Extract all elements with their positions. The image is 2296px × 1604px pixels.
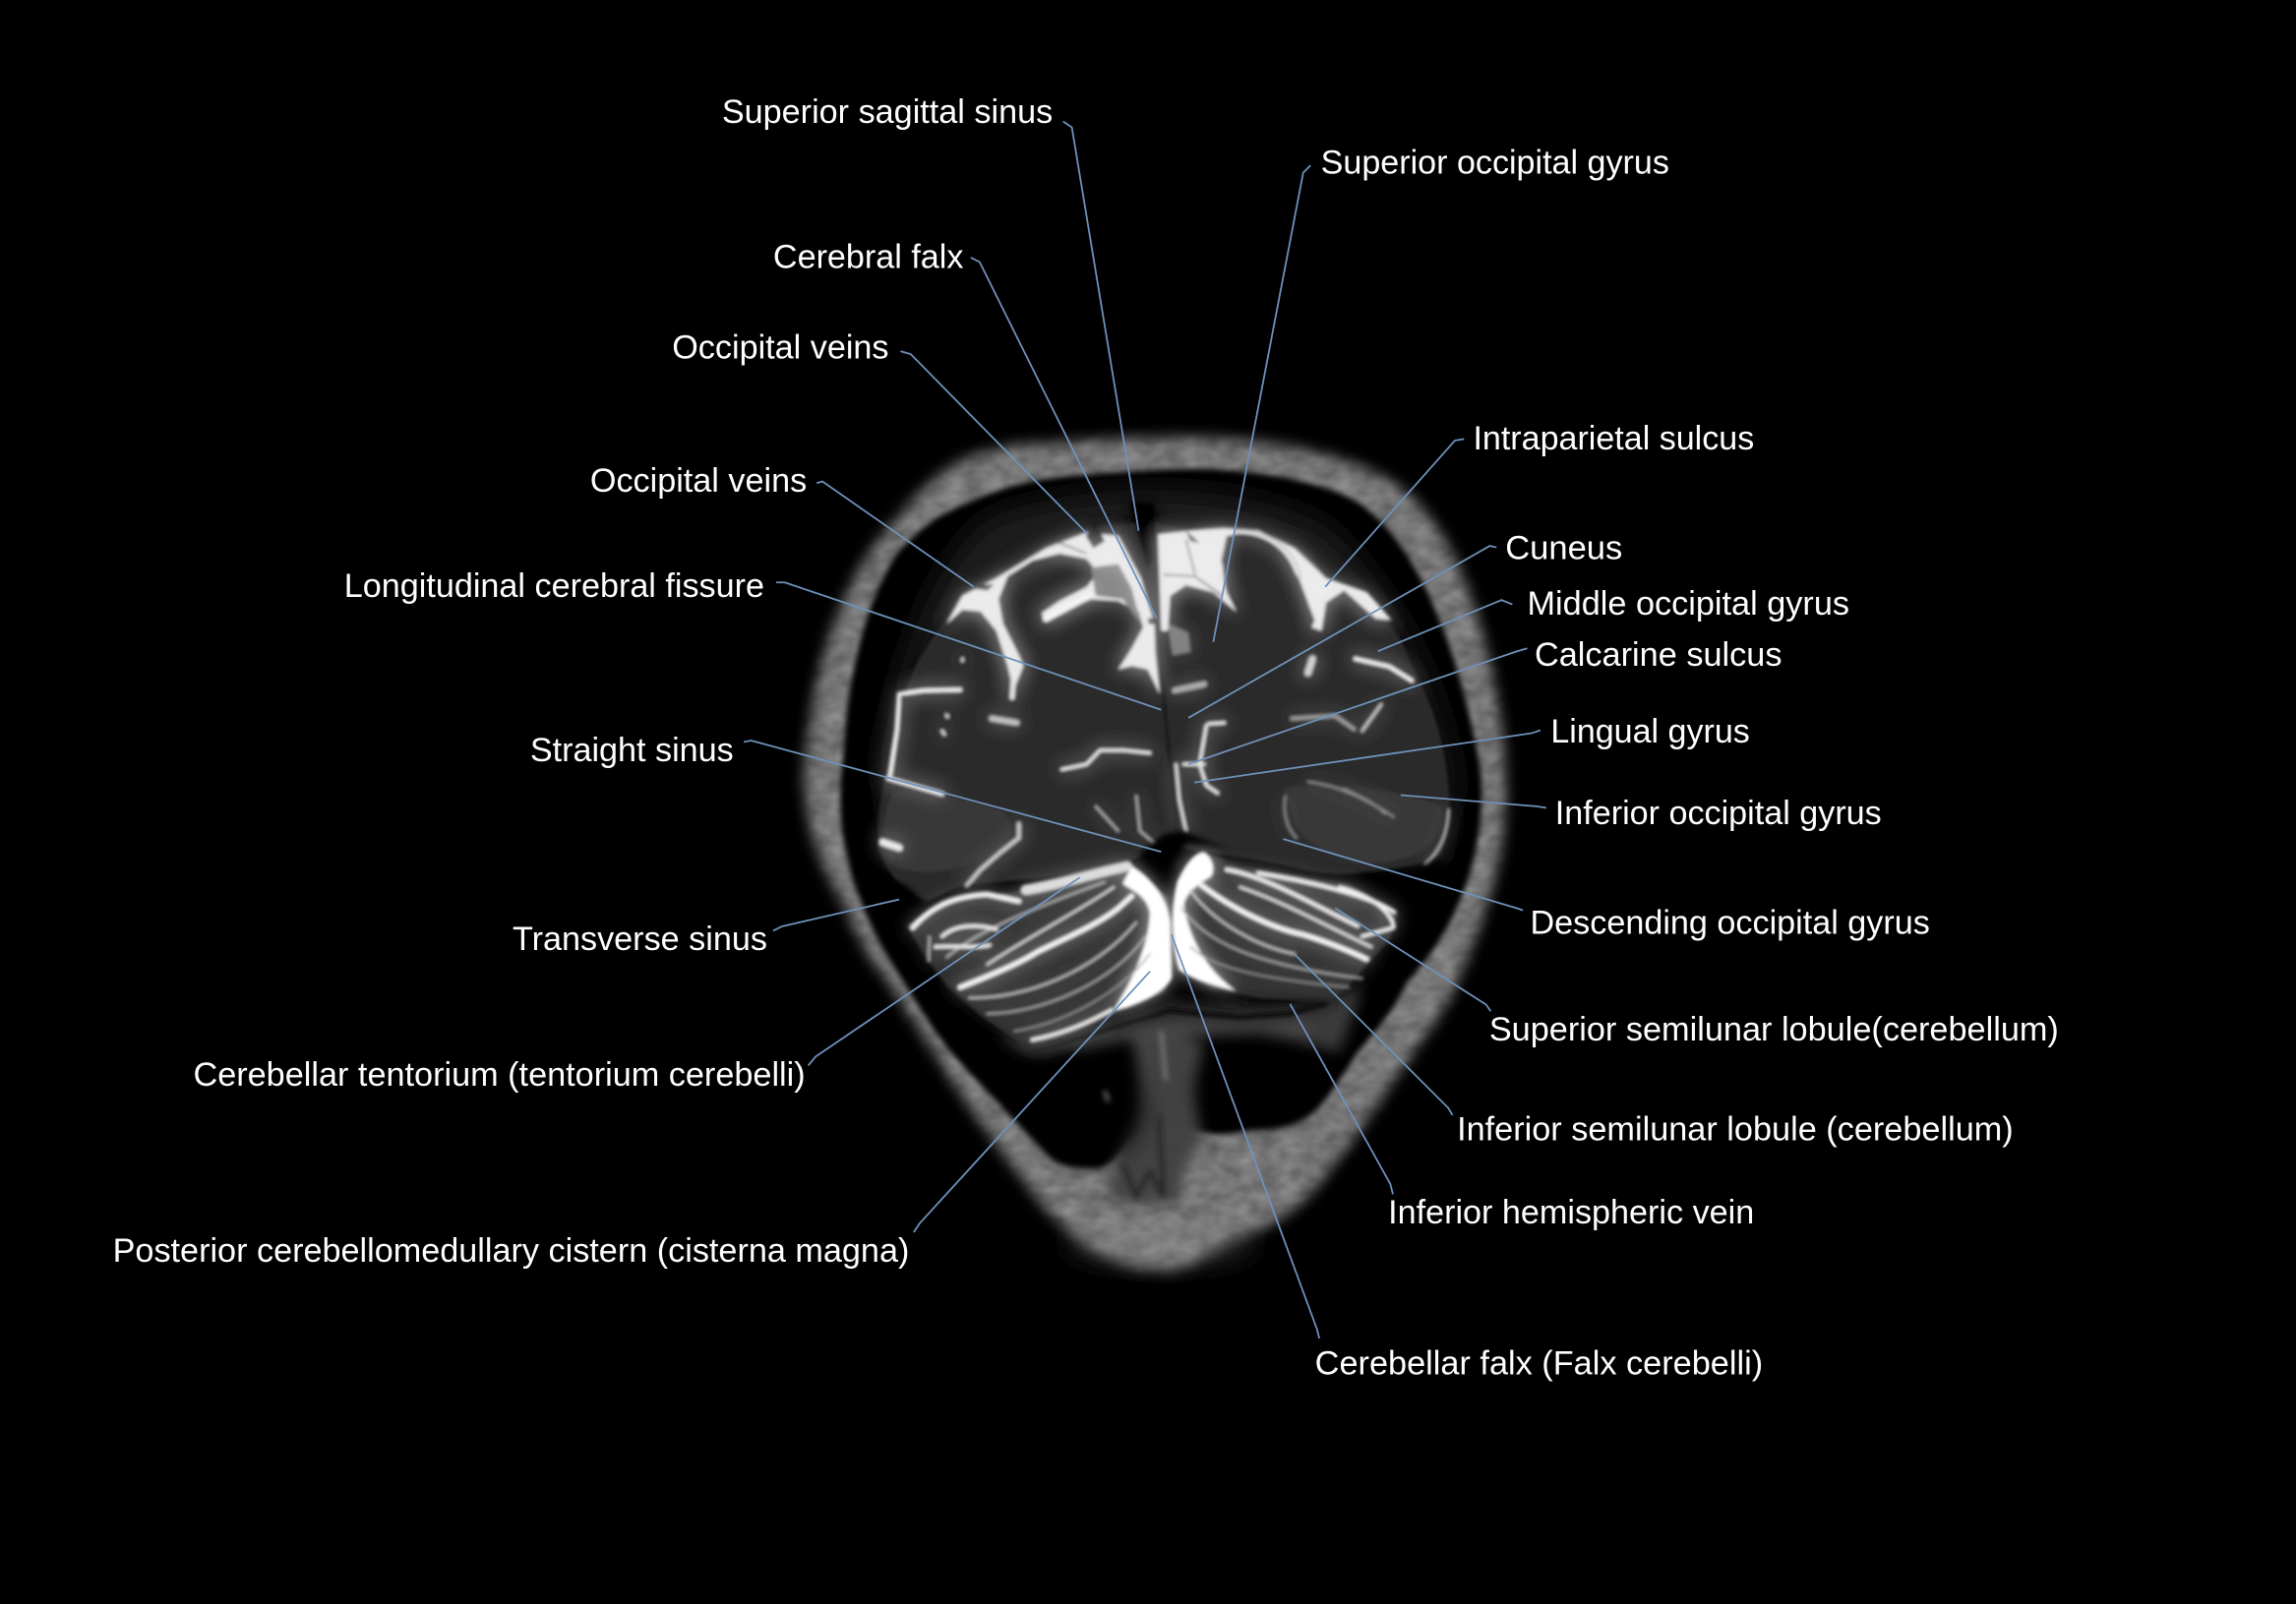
label: Longitudinal cerebral fissure: Longitudinal cerebral fissure <box>344 567 764 605</box>
label: Inferior occipital gyrus: Inferior occipital gyrus <box>1555 795 1882 832</box>
leader: Inferior hemispheric vein <box>1290 1004 1393 1194</box>
annotation layer: leader lines and labels <box>113 93 2059 1382</box>
ragged dark inferior edge <box>1033 1003 1326 1052</box>
black flow voids and falx <box>969 503 1199 624</box>
bright CSF: upper right <box>1158 528 1392 630</box>
black gaps around cerebellum <box>885 831 1443 975</box>
leader: Inferior occipital gyrus <box>1401 796 1546 807</box>
leader: Straight sinus <box>744 741 1161 852</box>
leader: Occipital veins (upper) <box>900 351 1088 534</box>
skull: dark ring inside scalp <box>840 469 1481 1168</box>
label: Superior occipital gyrus: Superior occipital gyrus <box>1321 144 1669 181</box>
right cerebellar hemisphere <box>1173 852 1398 999</box>
bright CSF: upper left <box>946 532 1160 694</box>
leader: Cuneus <box>1188 546 1496 718</box>
cerebellar folia <box>913 866 1394 1040</box>
leader: Transverse sinus <box>773 900 899 930</box>
midline neck structure <box>1105 1032 1166 1196</box>
label: Transverse sinus: Transverse sinus <box>513 921 767 958</box>
label: Posterior cerebellomedullary cistern: Posterior cerebellomedullary cistern (cisterna magna) <box>113 1232 909 1270</box>
left cerebellar hemisphere <box>906 864 1173 1045</box>
brain base: dark gray matter <box>878 522 1449 903</box>
midline fissure <box>1154 525 1177 831</box>
neck muscle and fat below the cerebellum <box>997 989 1362 1204</box>
subtle lighter cortex patches <box>883 785 1443 872</box>
label: Descending occipital gyrus: Descending occipital gyrus <box>1531 904 1930 941</box>
leader: Posterior cerebellomedullary cistern <box>914 972 1150 1232</box>
leader: Descending occipital gyrus <box>1284 839 1523 911</box>
leader: Superior semilunar lobule <box>1335 908 1490 1011</box>
leader: Intraparietal sulcus <box>1325 439 1464 587</box>
label: Occipital veins (upper): Occipital veins <box>672 329 889 367</box>
veins crossing CSF <box>1059 540 1222 596</box>
cisterna magna: bright CSF <box>1114 852 1236 1010</box>
label: Inferior semilunar lobule: Inferior semilunar lobule (cerebellum) <box>1457 1110 2014 1148</box>
anatomical labels <box>113 93 2059 1382</box>
leader: Inferior semilunar lobule <box>1295 954 1453 1115</box>
fat-suppressed dark ovals in the neck <box>1037 1056 1317 1158</box>
label: Middle occipital gyrus: Middle occipital gyrus <box>1528 585 1849 623</box>
leader: Occipital veins (lower) <box>816 482 974 587</box>
label: Cuneus: Cuneus <box>1505 529 1622 566</box>
leader: Superior occipital gyrus <box>1213 165 1310 642</box>
label: Straight sinus: Straight sinus <box>530 732 734 769</box>
label: Cerebellar falx: Cerebellar falx (Falx cerebelli) <box>1315 1344 1763 1382</box>
leader: Superior sagittal sinus <box>1063 122 1138 531</box>
leader: Lingual gyrus <box>1194 731 1541 783</box>
label: Cerebellar tentorium: Cerebellar tentorium (tentorium cerebelli) <box>193 1056 806 1094</box>
scalp and neck soft tissue ring <box>804 437 1506 1270</box>
small gyrus near midline, left <box>1110 670 1155 704</box>
leader: Cerebellar tentorium <box>809 877 1080 1065</box>
label: Lingual gyrus: Lingual gyrus <box>1550 713 1750 750</box>
dim CSF patches inside caps <box>1091 564 1190 655</box>
faint glow below the neck <box>1067 1219 1254 1263</box>
label: Inferior hemispheric vein: Inferior hemispheric vein <box>1388 1194 1754 1231</box>
label: Calcarine sulcus: Calcarine sulcus <box>1535 636 1782 674</box>
leader: Middle occipital gyrus <box>1378 600 1512 651</box>
label: Superior sagittal sinus: Superior sagittal sinus <box>722 93 1053 131</box>
dim tissue around the brain <box>878 491 1457 869</box>
label: Occipital veins (lower): Occipital veins <box>590 462 807 500</box>
cerebellum <box>906 852 1398 1052</box>
label: Superior semilunar lobule: Superior semilunar lobule(cerebellum) <box>1489 1011 2059 1048</box>
label: Intraparietal sulcus: Intraparietal sulcus <box>1473 420 1754 457</box>
gyrus in upper right, cortex rim <box>1223 534 1314 666</box>
MRI image: head cross-section <box>804 437 1506 1270</box>
leader: Cerebellar falx <box>1172 934 1319 1338</box>
gyrus inner bright edge <box>1234 530 1301 578</box>
cerebrum <box>878 503 1449 903</box>
sulci and bright strokes <box>882 596 1449 885</box>
leader: Cerebral falx <box>971 258 1157 619</box>
leader: Longitudinal cerebral fissure <box>776 582 1161 710</box>
label: Cerebral falx: Cerebral falx <box>773 238 963 275</box>
leader lines <box>744 122 1546 1338</box>
leader: Calcarine sulcus <box>1188 648 1528 764</box>
